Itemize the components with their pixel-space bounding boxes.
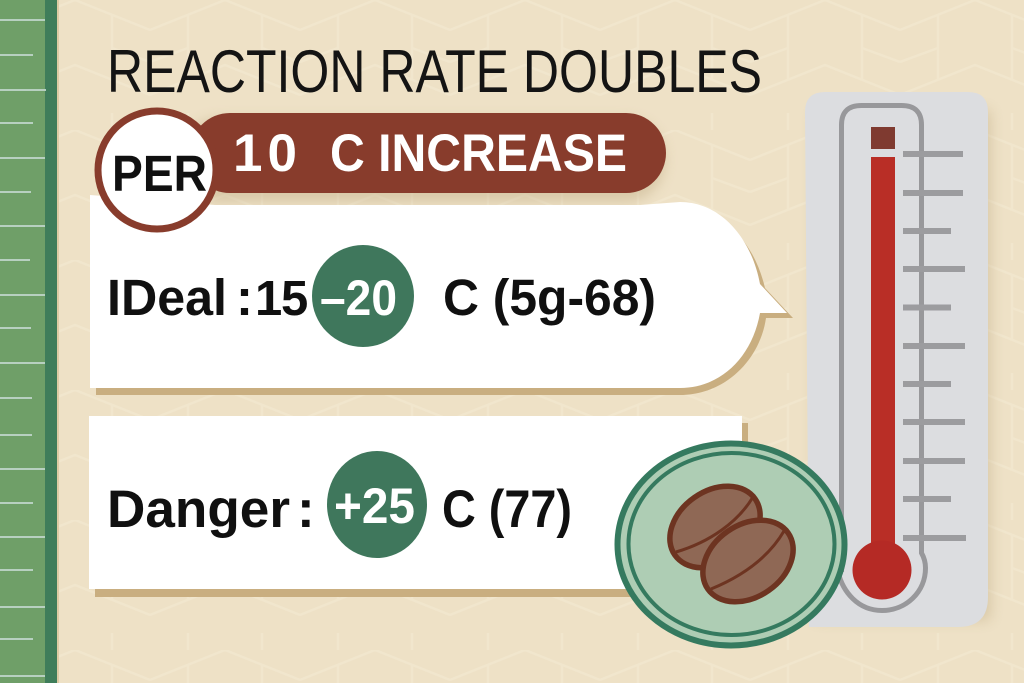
callout body bbox=[90, 195, 787, 388]
left ruler strip bbox=[0, 0, 59, 683]
ideal value badge: –20 bbox=[320, 270, 397, 326]
coffee bean front bbox=[687, 503, 809, 619]
danger label: : bbox=[297, 480, 315, 539]
ideal label: IDeal bbox=[107, 269, 227, 326]
banner text: 10 bbox=[233, 124, 297, 183]
coffee bean back bbox=[654, 469, 776, 585]
title: REACTION RATE DOUBLES bbox=[107, 38, 762, 105]
per badge bbox=[98, 111, 216, 229]
per 10 C increase banner bbox=[98, 111, 666, 229]
thermometer tube outline bbox=[838, 106, 926, 610]
ideal temperature callout bbox=[90, 195, 793, 395]
ideal value badge bbox=[312, 245, 414, 347]
banner text: C INCREASE bbox=[330, 124, 627, 183]
thermometer scale ticks bbox=[903, 154, 966, 538]
ideal label: 15 bbox=[255, 272, 308, 326]
panel shadow bbox=[815, 110, 990, 620]
medallion disc bbox=[618, 444, 844, 646]
danger value badge bbox=[327, 451, 427, 558]
thermometer red column and bulb bbox=[852, 157, 912, 600]
panel shadow bbox=[95, 423, 748, 597]
per badge: PER bbox=[112, 145, 207, 202]
danger label: Danger bbox=[107, 480, 290, 539]
banner bar bbox=[190, 113, 666, 193]
thermometer panel bbox=[805, 92, 990, 627]
panel card bbox=[805, 92, 988, 627]
danger units: C (77) bbox=[442, 480, 572, 539]
ideal units: C (5g-68) bbox=[443, 269, 656, 326]
danger temperature panel bbox=[89, 416, 748, 597]
band shadow bbox=[180, 118, 665, 202]
ideal label: : bbox=[236, 269, 253, 326]
panel body bbox=[89, 416, 742, 589]
danger value badge: +25 bbox=[334, 478, 415, 534]
coffee bean medallion bbox=[618, 444, 844, 646]
medallion inner ring bbox=[628, 453, 834, 635]
ideal label bbox=[107, 269, 308, 326]
callout shadow bbox=[96, 210, 793, 395]
thermometer top marker bbox=[871, 127, 895, 149]
